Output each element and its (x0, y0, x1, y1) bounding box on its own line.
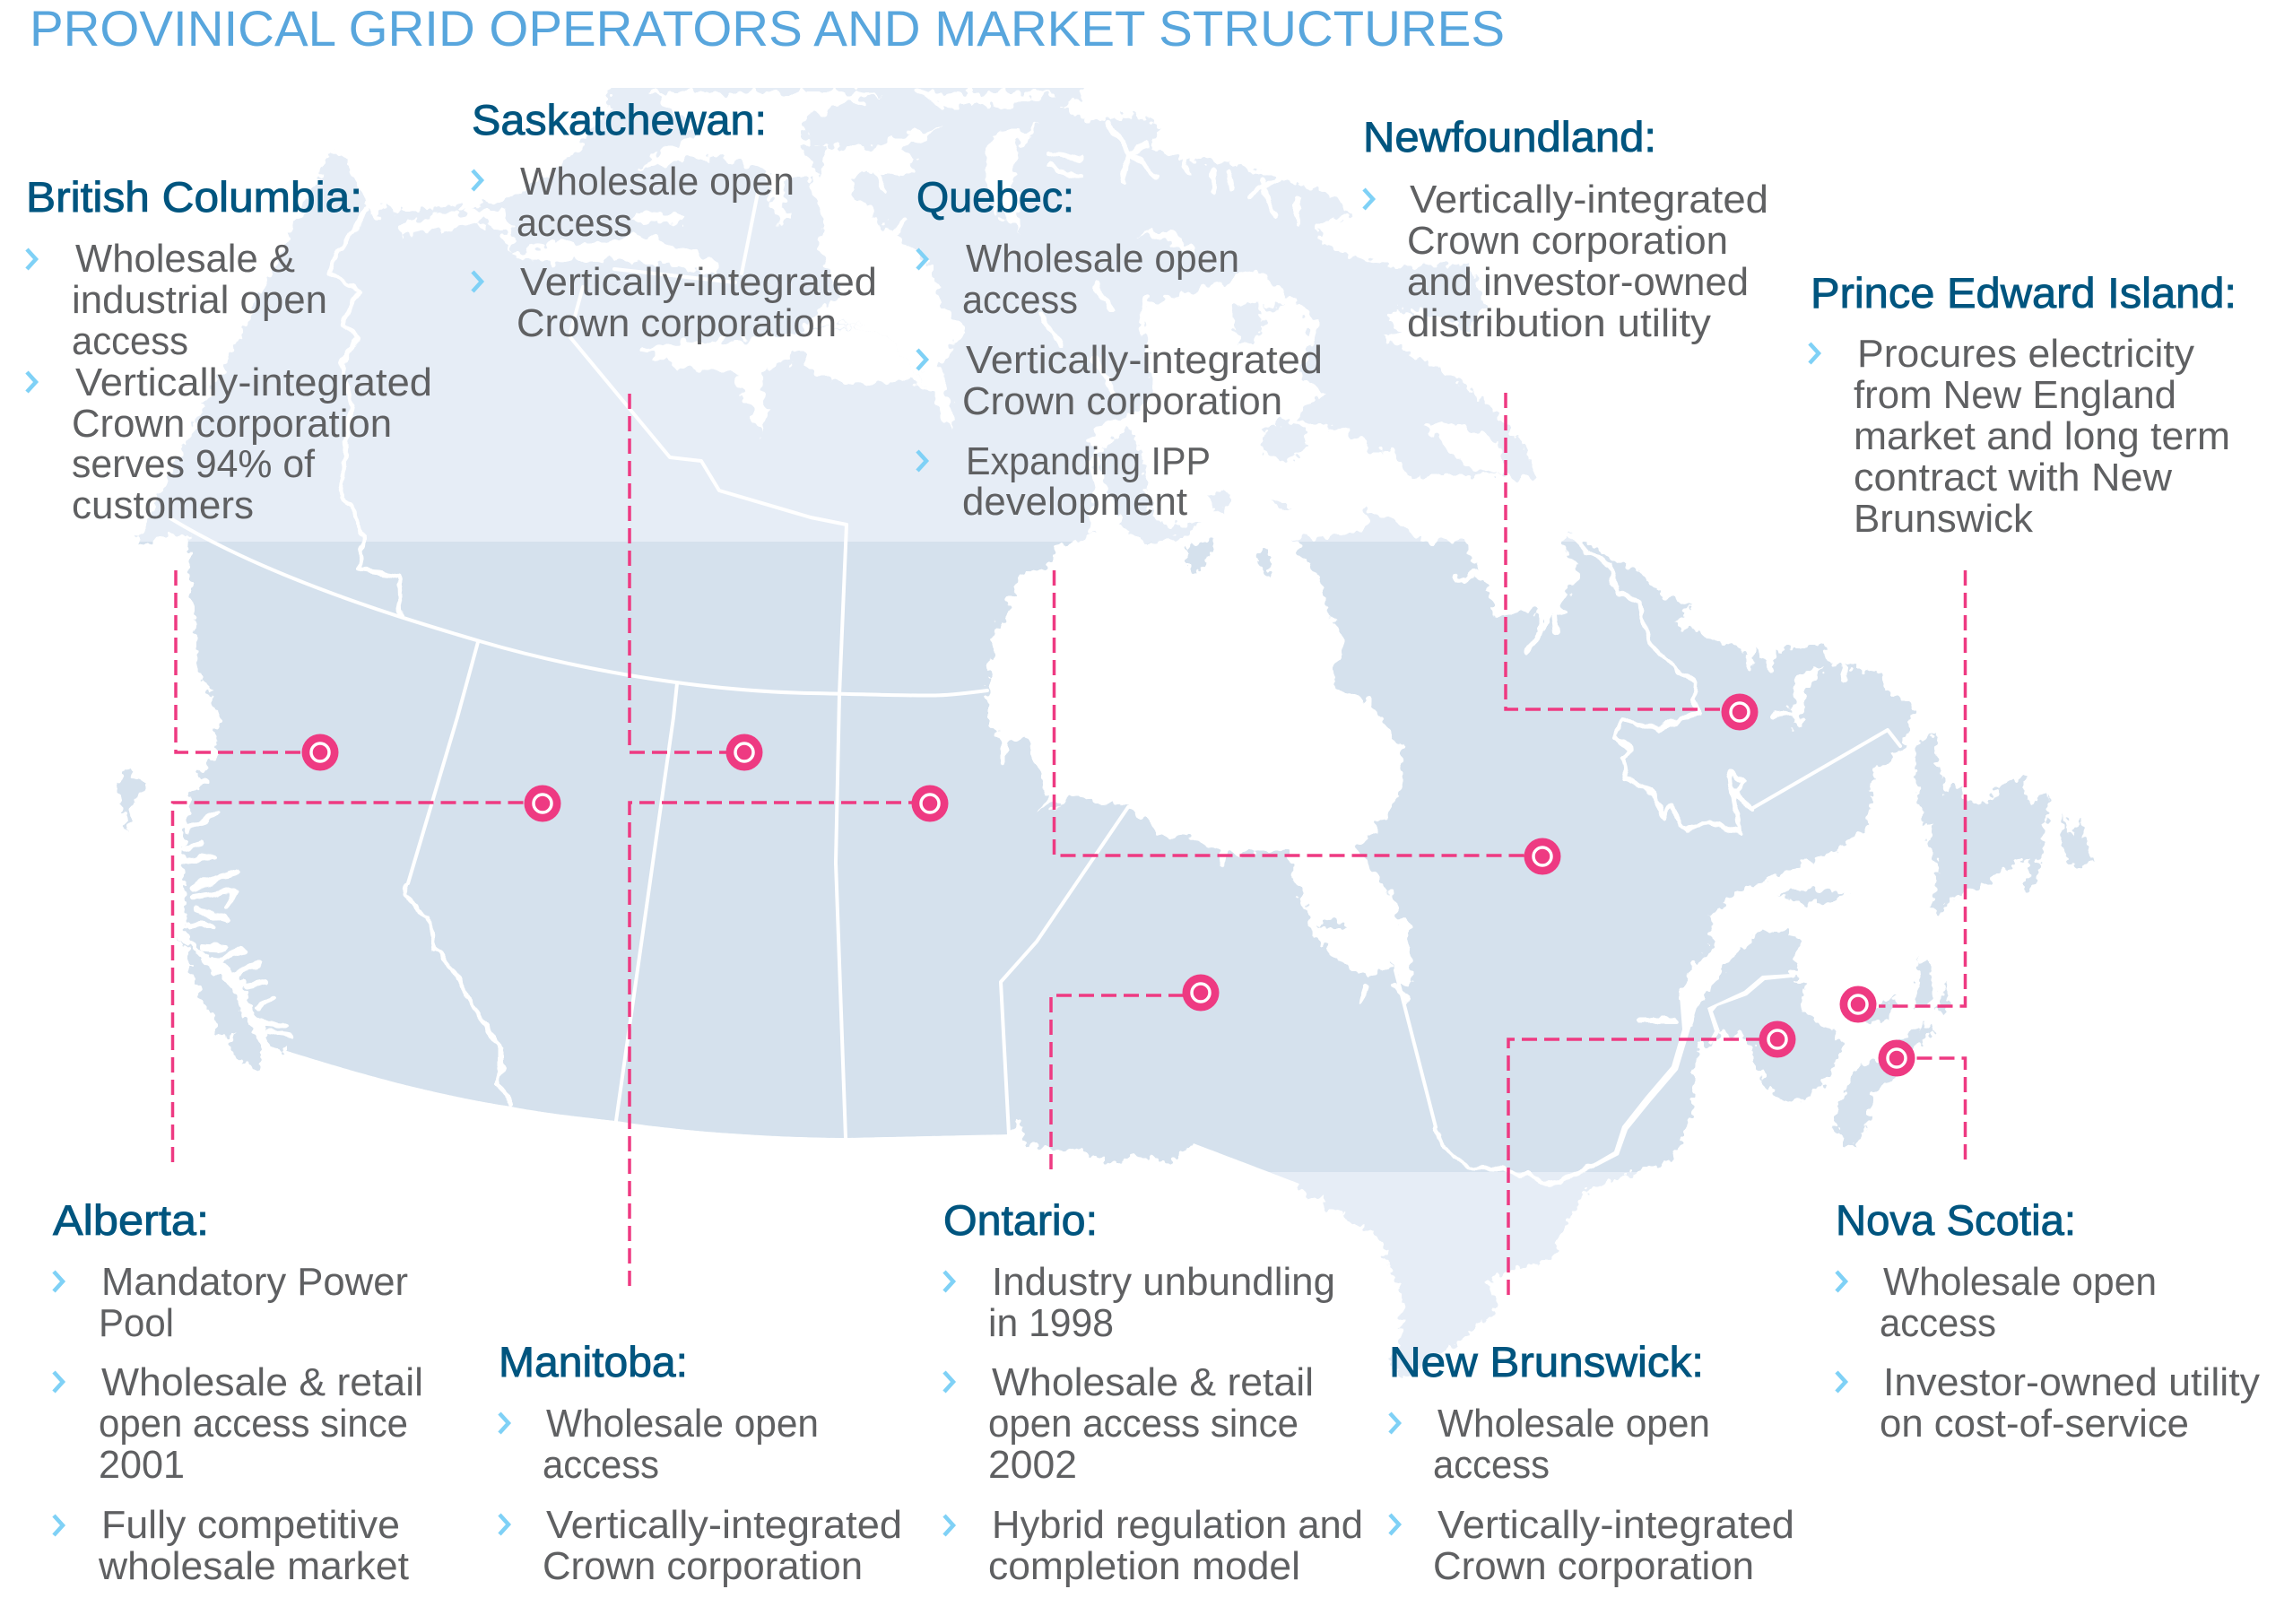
bullet: crown corporation and investor-owned utility: Vertically-integrated (1410, 178, 1768, 221)
bullet: wholesale and industrial access: Wholesale & (75, 237, 295, 281)
marker: Ontario (1182, 974, 1220, 1012)
connector: Quebec (1055, 570, 1529, 855)
bullet: vertically-integrated crown corporation: Vertically-integrated (546, 1503, 902, 1547)
bullet: procures electricity: market and long term (1854, 414, 2230, 458)
connector: British Columbia (176, 570, 305, 752)
bullet: vertically-integrated crown corporation: Vertically-integrated (966, 338, 1323, 382)
bullet: hybrid regulation and completion model (944, 1503, 1363, 1588)
panel: New Brunswick (1389, 1338, 1794, 1588)
marker: Prince Edward Island (1840, 986, 1876, 1022)
marker: New Brunswick (1759, 1020, 1795, 1058)
connector: Ontario (1051, 995, 1188, 1169)
heading: Nova Scotia: Nova Scotia: (1836, 1196, 2076, 1244)
heading: Manitoba: Manitoba: (499, 1338, 688, 1385)
bullet: wholesale and industrial access (27, 237, 327, 363)
bullet: crown corporation and investor-owned utility: and investor-owned (1407, 260, 1749, 304)
water: arctic channels, Hudson Bay and straits (401, 92, 1828, 986)
bullet: hybrid regulation and completion model: completion model (988, 1544, 1300, 1588)
bullet: wholesale and retail open access: 2002 (988, 1443, 1077, 1487)
bullet: wholesale open access (473, 160, 795, 245)
panel: Saskatchewan (472, 96, 877, 345)
connector: Saskatchewan (630, 394, 731, 752)
bullet: procures electricity: Procures electricity (1857, 332, 2194, 376)
bullet: vertically-integrated crown corporation: customers (72, 483, 254, 527)
bullet: expanding IPP development (917, 439, 1211, 524)
bullet: wholesale open access (917, 237, 1239, 322)
heading: Prince Edward Island: Prince Edward Island: (1811, 269, 2237, 317)
bullet: mandatory power pool (54, 1260, 408, 1345)
bullet: expanding IPP development: development (962, 480, 1187, 524)
landmass: darker central band (138, 542, 1916, 1172)
panel: Nova Scotia (1836, 1196, 2260, 1446)
bullet: vertically-integrated crown corporation: Crown corporation (517, 301, 837, 345)
bullet: wholesale open access: Wholesale open (966, 237, 1239, 281)
bullet: investor-owned utility on cost-of-service (1837, 1360, 2260, 1446)
title: PROVINICAL GRID OPERATORS AND MARKET STRUCTURES (30, 0, 1505, 56)
bullet: procures electricity: contract with New (1854, 456, 2172, 499)
bullet: investor-owned utility on cost-of-service: on cost-of-service (1880, 1402, 2189, 1446)
straight provincial borders (170, 193, 1900, 1138)
heading: Quebec: Quebec: (916, 173, 1074, 221)
bullet: vertically-integrated crown corporation: Crown corporation (72, 402, 392, 446)
smooth southern border (287, 1031, 1318, 1198)
bullet: industry unbundling: in 1998 (988, 1301, 1114, 1345)
bullet: wholesale open access: access (962, 278, 1078, 322)
heading: British Columbia: British Columbia: (26, 173, 362, 221)
bullet: wholesale open access: access (543, 1443, 659, 1487)
bullet: vertically-integrated crown corporation: Vertically-integrated (75, 360, 432, 404)
bullet: crown corporation and investor-owned utility: distribution utility (1407, 301, 1711, 345)
bullet: expanding IPP development: Expanding IPP (966, 439, 1211, 483)
bullet: fully competitive wholesale market: wholesale market (98, 1544, 409, 1588)
heading: Ontario: Ontario: (943, 1196, 1098, 1244)
connector: Nova Scotia (1915, 1058, 1966, 1159)
marker: Manitoba (911, 786, 949, 821)
heading: Alberta: Alberta: (53, 1196, 209, 1244)
marker: Saskatchewan (726, 734, 762, 771)
bullet: vertically-integrated crown corporation (499, 1503, 902, 1588)
bullet: wholesale and retail open access: 2001 (99, 1443, 185, 1487)
bullet: wholesale open access: access (1433, 1443, 1550, 1487)
bullet: vertically-integrated crown corporation: Crown corporation (543, 1544, 863, 1588)
bullet: procures electricity: from New England (1854, 373, 2176, 417)
islands (118, 146, 2094, 1148)
bullet: wholesale and industrial access: access (72, 319, 188, 363)
bullet: wholesale open access (499, 1402, 819, 1487)
bullet: industry unbundling: Industry unbundling (992, 1260, 1335, 1304)
bullet: crown corporation and investor-owned utility (1364, 178, 1768, 345)
bullet: hybrid regulation and completion model: Hybrid regulation and (992, 1503, 1363, 1547)
heading: New Brunswick: New Brunswick: (1389, 1338, 1704, 1385)
bullet: industry unbundling (944, 1260, 1335, 1345)
bullet: vertically-integrated crown corporation: Crown corporation (1433, 1544, 1754, 1588)
bullet: wholesale and retail open access: open access since (988, 1402, 1298, 1446)
heading: Newfoundland: Newfoundland: (1363, 113, 1656, 161)
bullet: procures electricity (1810, 332, 2230, 541)
panel: Newfoundland (1363, 113, 1768, 345)
bullet: wholesale and retail open access: Wholesale & retail (101, 1360, 423, 1404)
panel: Prince Edward Island (1810, 269, 2237, 541)
connector: Prince Edward Island (1879, 570, 1966, 1006)
panel: British Columbia (26, 173, 432, 527)
panel: Alberta (53, 1196, 423, 1588)
jagged borders, fjords and rivers (179, 90, 1846, 1184)
bullet: wholesale open access: Wholesale open (546, 1402, 819, 1446)
bullet: vertically-integrated crown corporation: serves 94% of (72, 442, 316, 486)
bullet: fully competitive wholesale market: Fully competitive (101, 1503, 400, 1547)
bullet: wholesale open access: Wholesale open (520, 160, 795, 204)
heading: Saskatchewan: Saskatchewan: (472, 96, 767, 143)
connector: Manitoba (630, 803, 915, 1286)
connector: Alberta (172, 803, 529, 1162)
bullet: vertically-integrated crown corporation: Vertically-integrated (520, 260, 877, 304)
bullet: wholesale and retail open access (54, 1360, 423, 1487)
St Lawrence river (1593, 974, 1792, 1167)
marker: Alberta (524, 786, 561, 821)
bullet: vertically-integrated crown corporation: Crown corporation (962, 379, 1282, 423)
bullet: wholesale and retail open access: Wholesale & retail (992, 1360, 1314, 1404)
bullet: wholesale open access: Wholesale open (1437, 1402, 1710, 1446)
bullet: crown corporation and investor-owned utility: Crown corporation (1407, 219, 1728, 263)
bullet: mandatory power pool: Mandatory Power (101, 1260, 408, 1304)
bullet: vertically-integrated crown corporation (917, 338, 1323, 423)
bullet: mandatory power pool: Pool (99, 1301, 174, 1345)
bullet: wholesale open access (1837, 1260, 2157, 1345)
bullet: wholesale and industrial access: industrial open (72, 278, 327, 322)
marker: Quebec (1524, 838, 1560, 875)
marker: Nova Scotia (1878, 1040, 1915, 1076)
bullet: wholesale and retail open access (944, 1360, 1314, 1487)
bullet: wholesale open access: access (1880, 1301, 1996, 1345)
bullet: vertically-integrated crown corporation (473, 260, 877, 345)
bullet: wholesale open access: access (517, 201, 632, 245)
bullet: fully competitive wholesale market (54, 1503, 409, 1588)
map of Canada (118, 81, 2094, 1380)
marker: Newfoundland (1722, 694, 1758, 730)
panel: Manitoba (499, 1338, 902, 1588)
bullet: wholesale open access (1390, 1402, 1710, 1487)
bullet: wholesale and retail open access: open access since (99, 1402, 408, 1446)
landmass: upper and lower light zones (135, 88, 1637, 1378)
connector: Newfoundland (1506, 393, 1726, 709)
connector: New Brunswick (1508, 1039, 1762, 1295)
bullet: vertically-integrated crown corporation (27, 360, 432, 527)
panel: Ontario (943, 1196, 1363, 1588)
bullet: procures electricity: Brunswick (1854, 497, 2034, 541)
panel: Quebec (916, 173, 1323, 524)
bullet: vertically-integrated crown corporation (1390, 1503, 1794, 1588)
marker: British Columbia (301, 734, 339, 771)
bullet: wholesale open access: Wholesale open (1883, 1260, 2157, 1304)
bullet: vertically-integrated crown corporation: Vertically-integrated (1437, 1503, 1794, 1547)
bullet: investor-owned utility on cost-of-service: Investor-owned utility (1883, 1360, 2260, 1404)
